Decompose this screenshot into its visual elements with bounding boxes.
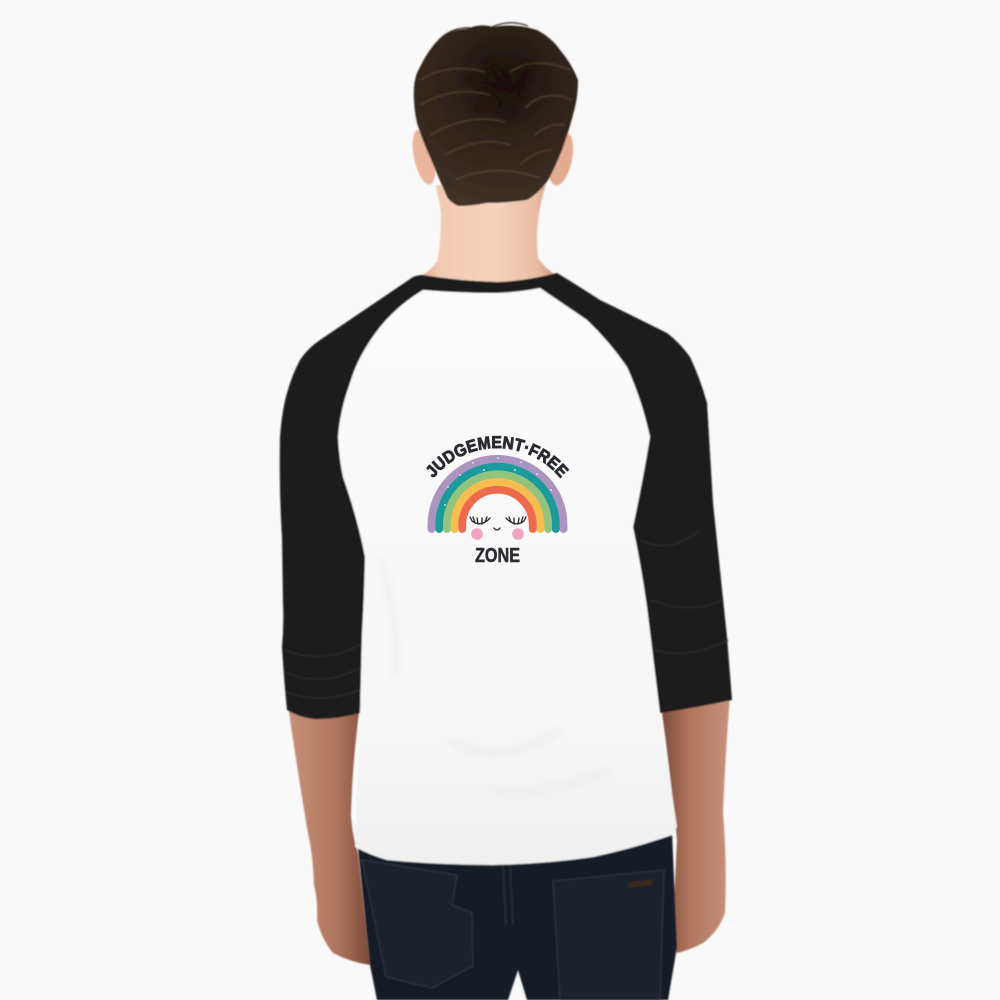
left ear [408, 128, 440, 186]
right sleeve [497, 273, 732, 713]
jeans right pocket [553, 870, 664, 1000]
shirt body [338, 288, 677, 865]
right arm and hand [661, 695, 730, 953]
rainbow sparkles [444, 457, 552, 506]
rainbow arcs [432, 459, 564, 529]
ZONE label: ZONE [475, 545, 520, 567]
face: cheeks [471, 528, 524, 540]
left arm and hand [288, 705, 370, 965]
face: closed eyes [470, 517, 526, 524]
curved heading: JUDGEMENT·FREE [426, 436, 570, 478]
hair [414, 23, 578, 206]
right ear [545, 130, 577, 188]
hair top wisps [442, 23, 528, 37]
jeans [358, 832, 677, 1000]
jeans left pocket [362, 860, 473, 988]
left sleeve [280, 275, 497, 719]
neck [420, 185, 556, 284]
jeans pocket label [628, 880, 652, 887]
face: smile [494, 528, 500, 530]
shirt print: rainbow graphic [426, 436, 570, 567]
model figure [280, 23, 732, 1000]
